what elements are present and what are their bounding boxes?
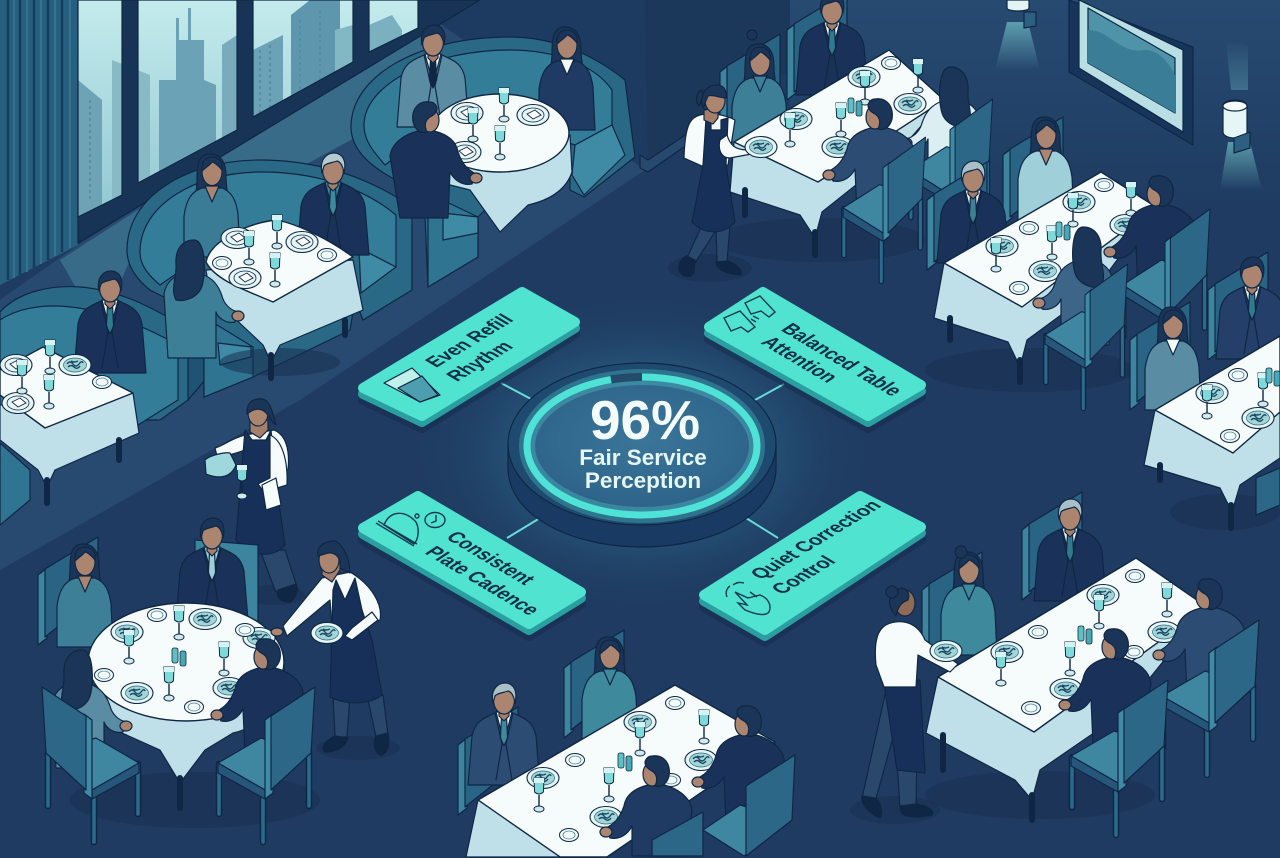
man seated bbox=[1216, 257, 1280, 359]
curtains bbox=[0, 0, 78, 285]
table top bbox=[478, 685, 775, 857]
woman bun bbox=[941, 552, 997, 655]
table booth first bbox=[390, 25, 595, 232]
back chairs bbox=[1003, 117, 1063, 225]
older man bbox=[468, 683, 540, 785]
icon: cloche and clock bbox=[376, 512, 445, 546]
older man bbox=[937, 161, 1009, 263]
value: 96% bbox=[590, 389, 700, 451]
chair left behind bbox=[720, 34, 780, 142]
chair right bbox=[703, 755, 795, 856]
cloth skirt bbox=[1144, 340, 1280, 512]
hub glow bbox=[407, 292, 877, 612]
sunlit floor strip bbox=[60, 28, 500, 330]
cloth skirt bbox=[926, 607, 1207, 800]
cloth skirt bbox=[730, 100, 944, 238]
connector lines bbox=[501, 383, 784, 538]
round table bottom left bbox=[38, 518, 320, 842]
man back right bbox=[1153, 579, 1245, 695]
back chair left bbox=[458, 707, 518, 815]
chair front bbox=[652, 812, 703, 856]
pillar bbox=[640, 0, 790, 172]
cloth skirt bbox=[934, 207, 1156, 367]
skyline through windows bbox=[78, 0, 418, 216]
label: Consistent bbox=[441, 528, 540, 589]
central hub bbox=[508, 363, 776, 547]
front chair right bbox=[218, 687, 315, 842]
man back bbox=[1104, 176, 1196, 292]
cloth skirt bbox=[206, 260, 363, 362]
table bottom middle bbox=[458, 630, 795, 857]
card: quiet correction control bbox=[704, 496, 921, 642]
table top bbox=[1155, 336, 1280, 453]
label: Even Refill bbox=[420, 311, 519, 371]
table top bbox=[431, 94, 569, 172]
woman back seated bbox=[900, 67, 980, 185]
label line two: Control bbox=[766, 553, 841, 598]
older man bbox=[1034, 499, 1106, 601]
ring gap bbox=[611, 377, 642, 380]
woman back bbox=[1033, 227, 1113, 345]
seated man bbox=[74, 271, 146, 373]
far right chair bbox=[1256, 468, 1280, 515]
waitress serving plate bbox=[271, 541, 400, 760]
back chair bbox=[1130, 302, 1190, 410]
cloth skirt bbox=[96, 662, 284, 783]
caption: Fair Service bbox=[579, 445, 707, 470]
icon: two tables bbox=[724, 296, 775, 332]
label line two: Attention bbox=[756, 333, 843, 386]
table top bbox=[938, 558, 1207, 732]
front chair left bbox=[42, 687, 139, 842]
diner woman booth first bbox=[539, 27, 595, 130]
wall lamp right bbox=[1220, 40, 1262, 190]
man back front bbox=[1059, 629, 1151, 745]
place settings bbox=[991, 570, 1180, 714]
caption line two: Perception bbox=[585, 468, 701, 493]
table top bbox=[88, 603, 284, 721]
waitress carrying plate bbox=[668, 85, 777, 282]
table top bbox=[0, 347, 133, 428]
waiter with plate bbox=[850, 586, 962, 824]
chair back right bbox=[1123, 209, 1210, 364]
booth far left seat block bbox=[0, 443, 30, 525]
label: Quiet Correction bbox=[745, 497, 887, 583]
icon: water glass bbox=[384, 368, 440, 402]
window frame bbox=[78, 0, 480, 243]
place settings bbox=[1196, 368, 1280, 442]
place settings bbox=[780, 56, 926, 158]
man back seated bbox=[823, 99, 915, 215]
back chair top bbox=[195, 540, 258, 640]
front chair bbox=[843, 137, 926, 281]
table top bbox=[734, 50, 944, 182]
table right bbox=[925, 117, 1210, 408]
progress ring bbox=[527, 377, 757, 515]
label line two: Plate Cadence bbox=[420, 543, 545, 619]
card: consistent plate cadence bbox=[363, 496, 581, 636]
back wall block bbox=[407, 0, 648, 172]
seated man bbox=[176, 518, 248, 620]
woman bun bbox=[732, 44, 788, 147]
table booth second bbox=[164, 153, 369, 378]
man back front bbox=[600, 756, 692, 856]
place settings bbox=[449, 88, 549, 162]
older man bbox=[297, 153, 369, 255]
seated woman back bbox=[52, 650, 132, 768]
table booth left bbox=[0, 271, 146, 503]
cloth skirt bbox=[0, 393, 139, 487]
man top bbox=[796, 0, 868, 95]
woman seated bbox=[1145, 307, 1201, 410]
back chair top bbox=[564, 630, 624, 738]
chair front bbox=[1045, 264, 1128, 408]
table top middle bbox=[715, 0, 992, 281]
table bottom right bbox=[922, 492, 1259, 835]
floor strip by the windows bbox=[0, 0, 645, 570]
wall picture bbox=[1069, 0, 1193, 145]
chair right back bbox=[910, 99, 992, 243]
woman bbox=[582, 637, 638, 740]
table top bbox=[206, 220, 353, 302]
seated man back bbox=[390, 102, 482, 218]
booth first bbox=[351, 37, 635, 287]
icon: tapping hand bbox=[726, 582, 770, 615]
chairs behind bbox=[787, 0, 847, 100]
table far right bbox=[1130, 252, 1280, 530]
chair right bbox=[1162, 620, 1259, 775]
seated woman bbox=[57, 544, 113, 647]
chair front bbox=[1071, 680, 1168, 835]
back chair left bbox=[922, 552, 982, 660]
label: Balanced Table bbox=[776, 320, 908, 400]
mullion outlines bbox=[78, 0, 418, 217]
back chair left bbox=[38, 537, 98, 645]
woman booth second bbox=[184, 154, 240, 257]
seated man back bbox=[211, 639, 303, 755]
back chair 2 bbox=[1208, 252, 1268, 360]
woman sleeveless bbox=[1018, 117, 1074, 220]
diners behind table bbox=[397, 25, 469, 127]
label line two: Rhythm bbox=[441, 338, 519, 385]
wall lamp top bbox=[995, 0, 1040, 70]
booth far left bbox=[0, 287, 205, 525]
cloth skirt bbox=[466, 800, 560, 857]
table top bbox=[944, 172, 1156, 307]
back chair left bbox=[927, 162, 987, 270]
seated woman back bbox=[164, 240, 244, 358]
waitress pouring water bbox=[205, 399, 305, 605]
place settings bbox=[986, 178, 1142, 294]
back chair top bbox=[1022, 492, 1082, 600]
place settings bbox=[212, 215, 336, 288]
cloth skirt bbox=[432, 135, 572, 232]
card: even refill rhythm bbox=[363, 292, 575, 428]
man back right bbox=[692, 706, 784, 822]
place settings bbox=[0, 340, 112, 414]
booth second bbox=[127, 160, 412, 397]
card: balanced table attention bbox=[709, 292, 921, 428]
place settings bbox=[527, 696, 717, 842]
right back wall bbox=[790, 0, 1280, 200]
place settings bbox=[94, 606, 275, 714]
